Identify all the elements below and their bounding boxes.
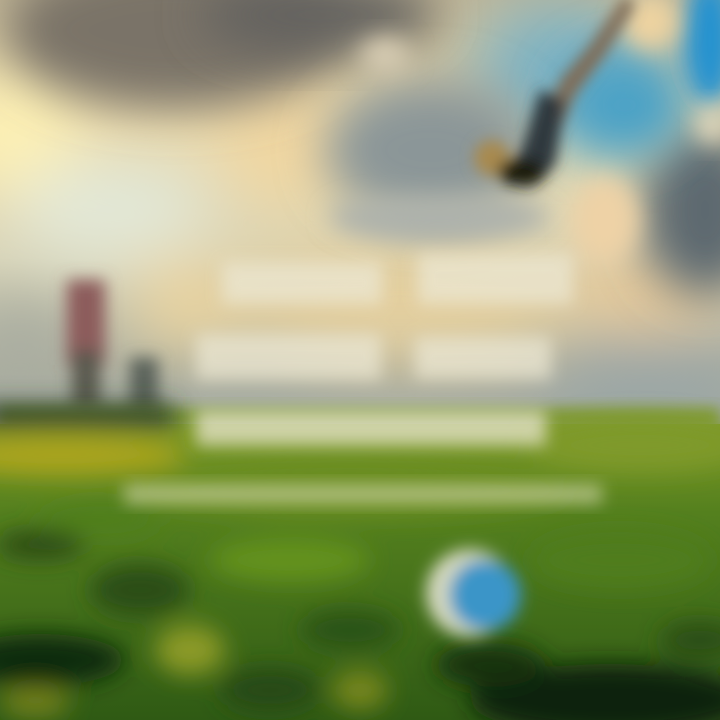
subtitle text block	[124, 484, 602, 504]
sky	[0, 0, 720, 430]
field	[0, 404, 720, 720]
golf club	[474, 0, 635, 188]
towers	[67, 280, 158, 416]
title text blocks	[196, 254, 573, 446]
golf ball	[426, 549, 521, 637]
clouds	[5, 0, 720, 295]
